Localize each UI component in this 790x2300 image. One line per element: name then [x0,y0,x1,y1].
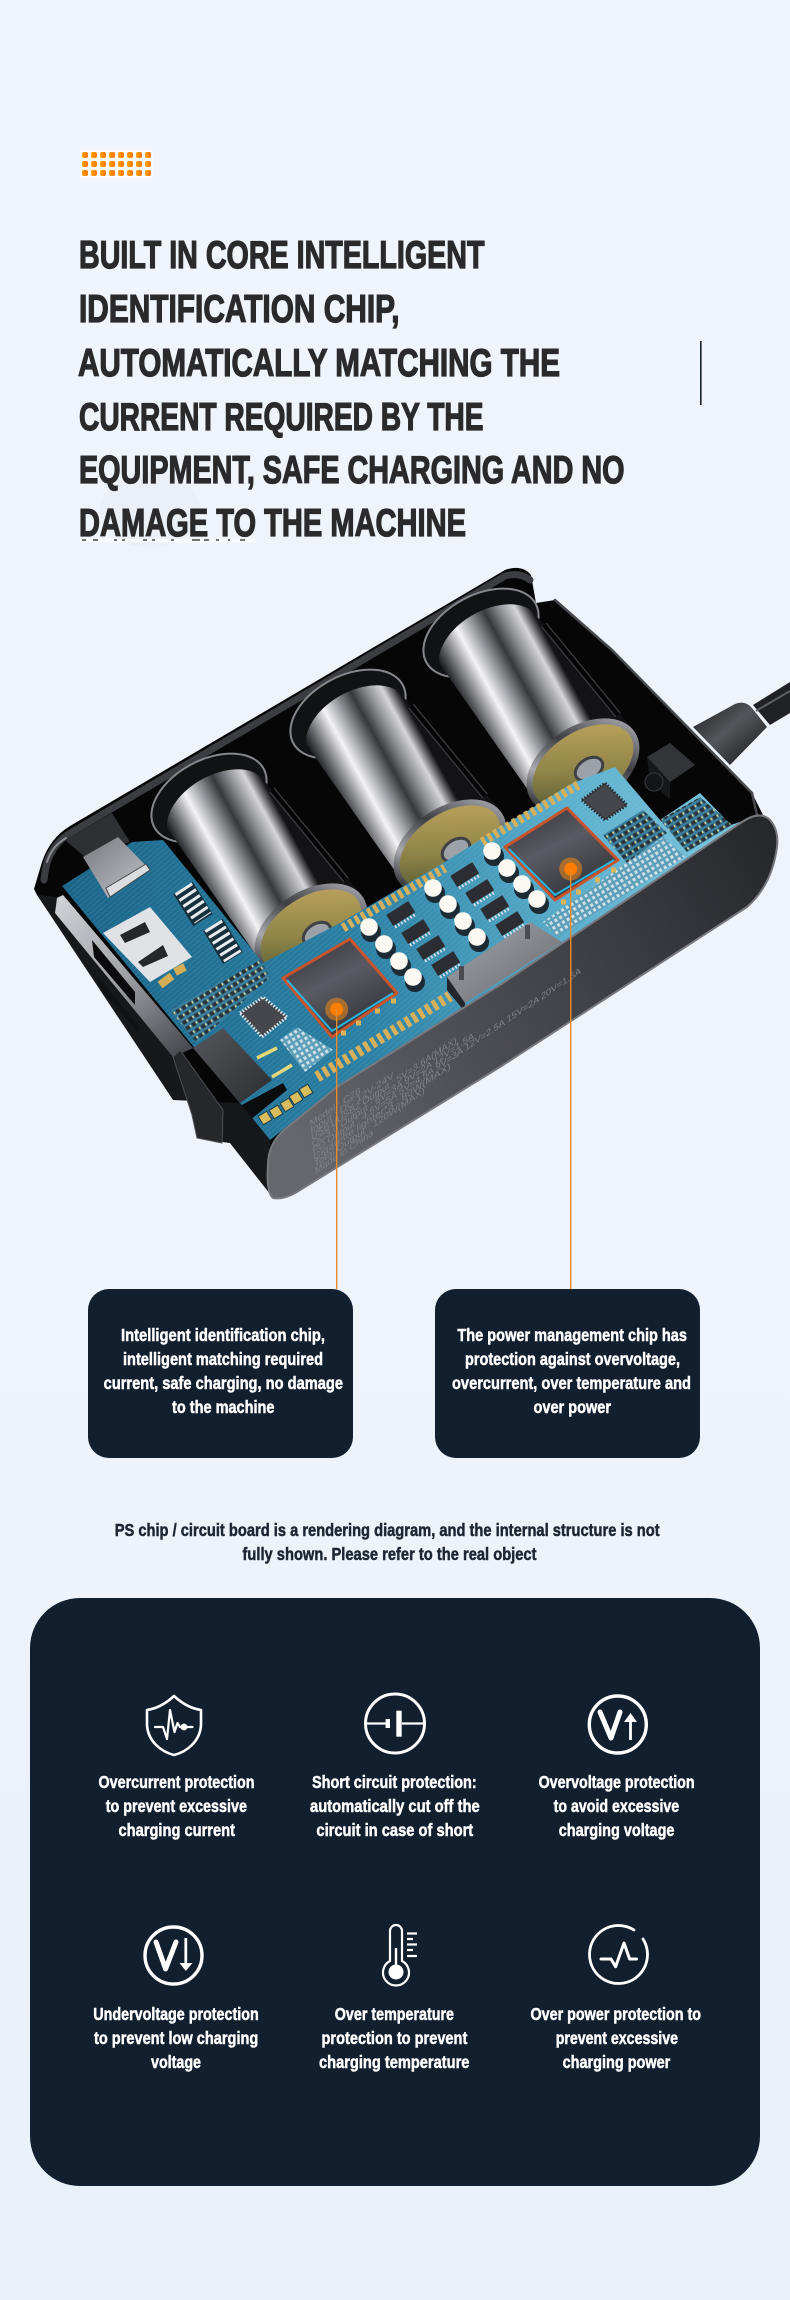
vertical accent line [700,341,702,405]
icon: thermometer [383,1925,417,1986]
title: CURRENT REQUIRED BY THE [79,396,484,439]
shell rim highlight [44,575,757,880]
disclaimer text: fully shown. Please refer to the real object [242,1544,537,1564]
title: DAMAGE TO THE MACHINE [79,502,466,545]
callout line: left chip [325,998,348,1289]
label: over temperature: Over temperature [335,2004,454,2024]
callout box: power management chip: overcurrent, over temperature and [452,1373,691,1393]
logic chips [386,862,525,978]
clipped text remnant under title [80,539,256,542]
label: undervoltage: to prevent low charging [94,2028,258,2048]
label: over temperature: protection to prevent [322,2028,467,2048]
disclaimer text: PS chip / circuit board is a rendering diagram, and the internal structure is not [115,1520,660,1540]
icon: overcurrent shield [147,1696,201,1755]
label: overcurrent: Overcurrent protection [98,1772,254,1792]
icon: orange dot grid [80,150,153,178]
label: short circuit: automatically cut off the [310,1796,480,1816]
small QFP chips [240,783,627,1037]
panel spec text: Model : C28 [309,1085,361,1130]
panel spec text: Input : DC 12V-24V [310,1070,395,1137]
panel spec text: Made in China [314,1127,374,1177]
rear shell [34,568,777,1198]
callout box: power management chip: over power [534,1397,611,1417]
icon: overvoltage [589,1696,646,1753]
front panel [268,815,777,1198]
label: undervoltage [93,2004,259,2072]
rear connector block [645,743,695,800]
icon: undervoltage [145,1927,202,1984]
label: over temperature [319,2004,470,2072]
micro USB connector [83,837,150,898]
label: overcurrent [98,1772,254,1840]
black block [193,1028,287,1120]
socket cylinder 3 [408,570,653,829]
label: short circuit [310,1772,480,1840]
label: overcurrent: charging current [118,1820,235,1840]
panel spec text [309,938,584,1177]
icon: short circuit [365,1694,425,1753]
left side face with ports [37,895,270,1190]
panel spec text: Total Output : 120W(MAX) [314,1085,425,1170]
label: overvoltage: to avoid excessive [554,1796,679,1816]
label: over temperature: charging temperature [319,2052,470,2072]
callout box: power management chip: protection against overvoltage, [465,1349,680,1369]
panel spec text: PD Output : 4.5V=5A 5V=4.5A 9V=3A 12V=2.5A 15V=2A 20V=1.5A [312,965,582,1157]
title [78,234,624,545]
socket cylinder 1 [136,735,381,994]
product: charger cutaway [34,568,790,1198]
label: overvoltage [539,1772,695,1840]
icon: over power [589,1926,647,1984]
white terminal plate [103,907,192,985]
chip: power management [505,808,618,902]
label: overvoltage: charging voltage [559,1820,675,1840]
callout box: identification chip: to the machine [172,1397,275,1417]
callout box: identification chip [88,1289,353,1458]
label: over power [530,2004,701,2072]
label: over power: prevent excessive [556,2028,678,2048]
panel: protection features [30,1598,760,2186]
title: IDENTIFICATION CHIP, [79,288,400,331]
callout box: power management chip [435,1289,700,1458]
label: over power: Over power protection to [530,2004,701,2024]
circuit board [62,767,760,1140]
pad fields [170,797,732,1072]
panel spec text: QC3.0 Output : 5V=3A 9V=2A 12V=1.5A [311,1030,475,1150]
coils [183,888,233,958]
capacitors [360,842,549,992]
title: BUILT IN CORE INTELLIGENT [79,234,485,277]
label: overcurrent: to prevent excessive [106,1796,247,1816]
socket cylinder 2 [275,651,520,910]
label: undervoltage: Undervoltage protection [93,2004,259,2024]
cable and strain relief [693,682,790,765]
label: short circuit: Short circuit protection: [312,1772,477,1792]
callout box: identification chip: current, safe charging, no damage [104,1373,343,1393]
label: short circuit: circuit in case of short [316,1820,473,1840]
title: AUTOMATICALLY MATCHING THE [78,342,560,385]
callout box: identification chip: intelligent matching required [123,1349,323,1369]
label: undervoltage: voltage [151,2052,201,2072]
callout box: power management chip: The power management chip has [457,1325,687,1345]
callout box: identification chip: Intelligent identification chip, [121,1325,325,1345]
chip: identification [283,939,397,1037]
square gold pads [258,1084,313,1125]
disclaimer text [115,1520,660,1564]
label: overvoltage: Overvoltage protection [539,1772,695,1792]
panel spec text: Cigarette lighter*3 : 80W(MAX) [313,1061,451,1164]
panel spec text: USB1/USB2 Output : 5V=3.6A(MAX) [311,1035,457,1143]
gold contact rows [257,785,578,1077]
label: over power: charging power [563,2052,670,2072]
connector housing [447,922,562,1012]
callout line: right chip [559,858,582,1289]
